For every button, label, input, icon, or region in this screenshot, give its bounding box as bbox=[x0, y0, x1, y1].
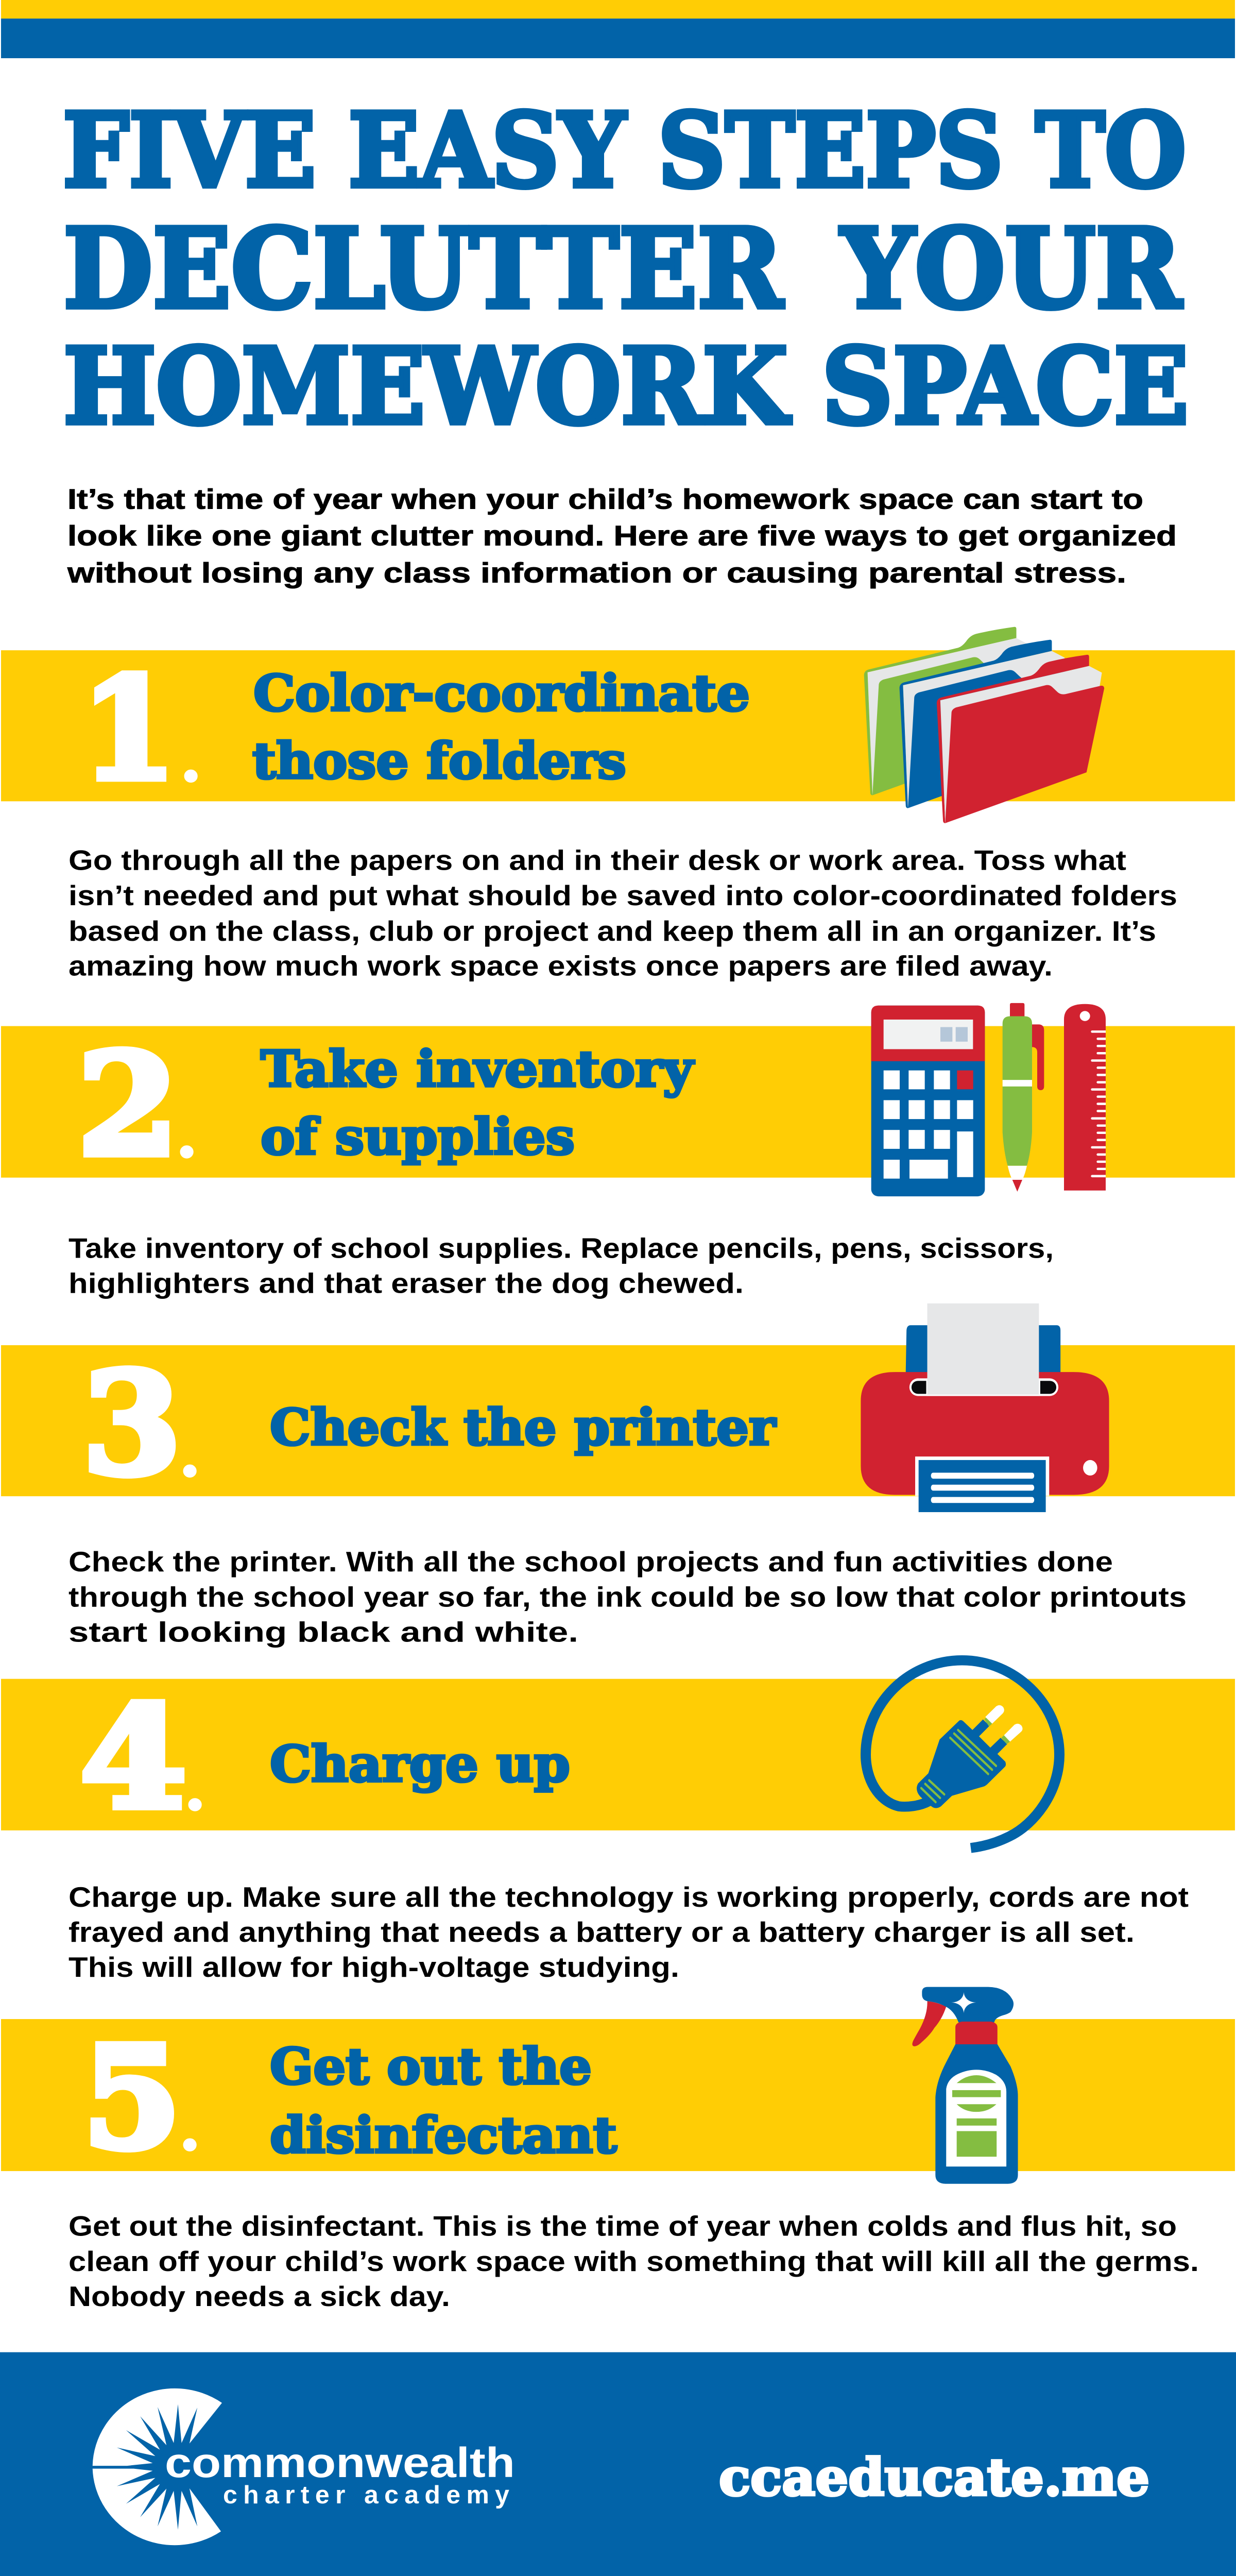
icon: ruler bbox=[1064, 1004, 1106, 1191]
step 4 body text: Charge up. Make sure all the technology is working properly, cords are not bbox=[68, 1881, 1189, 1913]
logo wordmark bbox=[165, 2439, 515, 2509]
logo wordmark: charter academy bbox=[223, 2481, 510, 2509]
step 4 body text bbox=[68, 1881, 1189, 1983]
step 4 body text: This will allow for high-voltage studying. bbox=[68, 1952, 679, 1983]
step 2 body text bbox=[68, 1232, 1054, 1299]
step 4 body text: frayed and anything that needs a battery or a battery charger is all set. bbox=[68, 1917, 1135, 1948]
logo sunburst bbox=[93, 2388, 222, 2545]
step 1 heading bbox=[252, 664, 750, 790]
step 1 heading: those folders bbox=[252, 732, 626, 790]
step 5 heading: disinfectant bbox=[270, 2106, 617, 2165]
step number 3: . bbox=[178, 1416, 201, 1492]
step 5 body text: Get out the disinfectant. This is the time of year when colds and flus hit, so bbox=[68, 2210, 1177, 2242]
step 3 body text: start looking black and white. bbox=[68, 1616, 578, 1648]
step 5 heading bbox=[270, 2038, 617, 2165]
panel: footer bbox=[0, 2352, 1236, 2576]
step 2 heading: Take inventory bbox=[261, 1040, 695, 1098]
step 3 heading: Check the printer bbox=[270, 1398, 777, 1457]
step 2 body text: highlighters and that eraser the dog chewed. bbox=[68, 1267, 744, 1299]
step 1 body text bbox=[68, 844, 1177, 981]
step 4 heading: Charge up bbox=[270, 1735, 570, 1793]
panel: step 2 bbox=[1, 1003, 1235, 1196]
step number 4: 4 bbox=[80, 1675, 187, 1840]
step number 1: . bbox=[179, 721, 202, 797]
intro text: look like one giant clutter mound. Here are five ways to get organized bbox=[67, 520, 1177, 551]
step number 2: . bbox=[175, 1096, 198, 1173]
icon: folders bbox=[864, 627, 1104, 823]
logo wordmark: commonwealth bbox=[165, 2439, 515, 2486]
step 1 body text: isn’t needed and put what should be saved into color-coordinated folders bbox=[68, 880, 1177, 911]
step 3 body text: through the school year so far, the ink could be so low that color printouts bbox=[68, 1581, 1187, 1613]
step number 5: 5 bbox=[82, 2015, 181, 2180]
step 3 body text: Check the printer. With all the school projects and fun activities done bbox=[68, 1546, 1113, 1578]
panel: step 1 bbox=[1, 627, 1235, 823]
step 5 body text: Nobody needs a sick day. bbox=[68, 2281, 450, 2312]
icon: calculator, pen and ruler bbox=[871, 1003, 1106, 1196]
panel: step 3 bbox=[1, 1303, 1235, 1512]
website address: ccaeducate.me bbox=[719, 2447, 1149, 2507]
step number 4: . bbox=[183, 1749, 207, 1825]
step 1 body text: amazing how much work space exists once papers are filed away. bbox=[68, 950, 1053, 981]
icon: calculator bbox=[871, 1006, 985, 1196]
intro text: It’s that time of year when your child’s homework space can start to bbox=[67, 483, 1143, 515]
step 3 body text bbox=[68, 1546, 1187, 1648]
icon: spray bottle bbox=[912, 1987, 1018, 2184]
title: DECLUTTER bbox=[63, 205, 784, 333]
step 5 heading: Get out the bbox=[270, 2038, 592, 2096]
step 1 body text: Go through all the papers on and in their desk or work area. Toss what bbox=[68, 844, 1126, 876]
step 5 body text bbox=[68, 2210, 1199, 2312]
icon: printer bbox=[861, 1303, 1109, 1512]
panel: step 4 bbox=[1, 1660, 1235, 1848]
intro text bbox=[67, 483, 1177, 589]
icon: pen bbox=[1003, 1003, 1044, 1192]
step 5 body text: clean off your child’s work space with something that will kill all the germs. bbox=[68, 2246, 1199, 2277]
logo: commonwealth charter academy bbox=[93, 2388, 515, 2545]
step number 5: . bbox=[178, 2090, 201, 2166]
step 2 body text: Take inventory of school supplies. Replace pencils, pens, scissors, bbox=[68, 1232, 1054, 1264]
step number 2: 2 bbox=[77, 1022, 179, 1188]
title: YOUR bbox=[840, 205, 1182, 333]
step 1 body text: based on the class, club or project and keep them all in an organizer. It’s bbox=[68, 916, 1156, 947]
title bbox=[63, 91, 1189, 448]
step 2 heading bbox=[261, 1040, 695, 1166]
step 2 heading: of supplies bbox=[261, 1108, 575, 1166]
step 1 heading: Color-coordinate bbox=[253, 664, 750, 723]
step number 3: 3 bbox=[82, 1342, 181, 1506]
panel: step 5 bbox=[1, 1987, 1235, 2184]
icon: plug and cord bbox=[866, 1660, 1059, 1848]
step number 1: 1 bbox=[81, 647, 177, 812]
top header bars bbox=[1, 0, 1235, 58]
intro text: without losing any class information or causing parental stress. bbox=[67, 557, 1126, 589]
